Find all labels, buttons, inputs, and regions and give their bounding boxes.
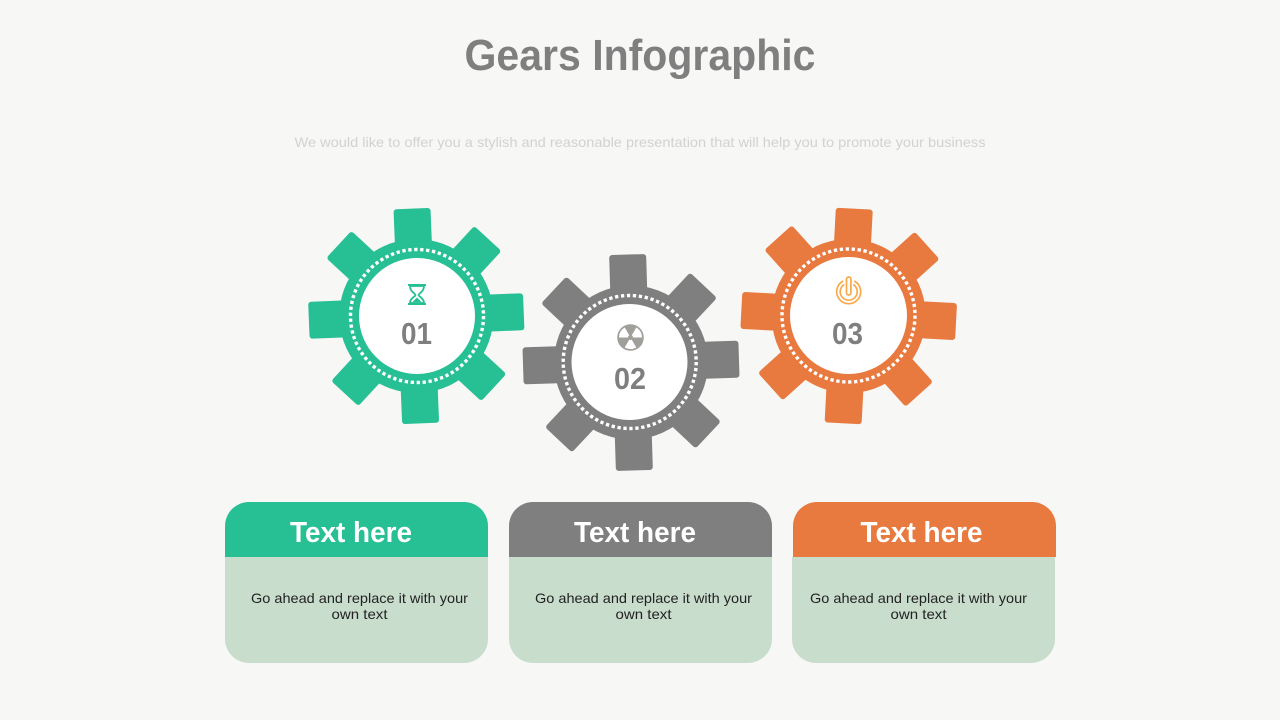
card 2 body [509, 557, 772, 663]
card 1 heading: Text here [290, 517, 412, 549]
card 3 heading: Text here [860, 517, 982, 549]
card 2 text: Go ahead and replace it with your [535, 590, 752, 606]
card 3 body [792, 557, 1055, 663]
panel: card 3 [792, 502, 1056, 663]
panel: card 1 [225, 502, 488, 663]
card 3 text: Go ahead and replace it with your [810, 590, 1027, 606]
icon: power button [837, 277, 861, 304]
icon: radiation symbol [617, 324, 644, 351]
card 3 header [793, 502, 1056, 557]
card 2 text: own text [616, 606, 672, 622]
panel: card 2 [509, 502, 772, 663]
card 3 text: own text [890, 606, 947, 622]
card 1 text: Go ahead and replace it with your [251, 590, 468, 606]
card 2 heading: Text here [574, 517, 696, 549]
card 1 text: own text [332, 606, 388, 622]
gear 03: orange [736, 203, 962, 429]
title: Gears Infographic [464, 31, 816, 80]
subtitle: We would like to offer you a stylish and reasonable presentation that will help you to promote your business [294, 134, 986, 150]
card 1 header [225, 502, 488, 557]
card 2 header [509, 502, 772, 557]
number 01: 01 [401, 316, 432, 351]
gear 01: green [305, 204, 528, 428]
icon: hourglass [408, 285, 426, 304]
card 1 body [225, 557, 488, 663]
number 03: 03 [832, 316, 863, 351]
gear 02: grey [520, 251, 742, 474]
number 02: 02 [614, 361, 646, 396]
